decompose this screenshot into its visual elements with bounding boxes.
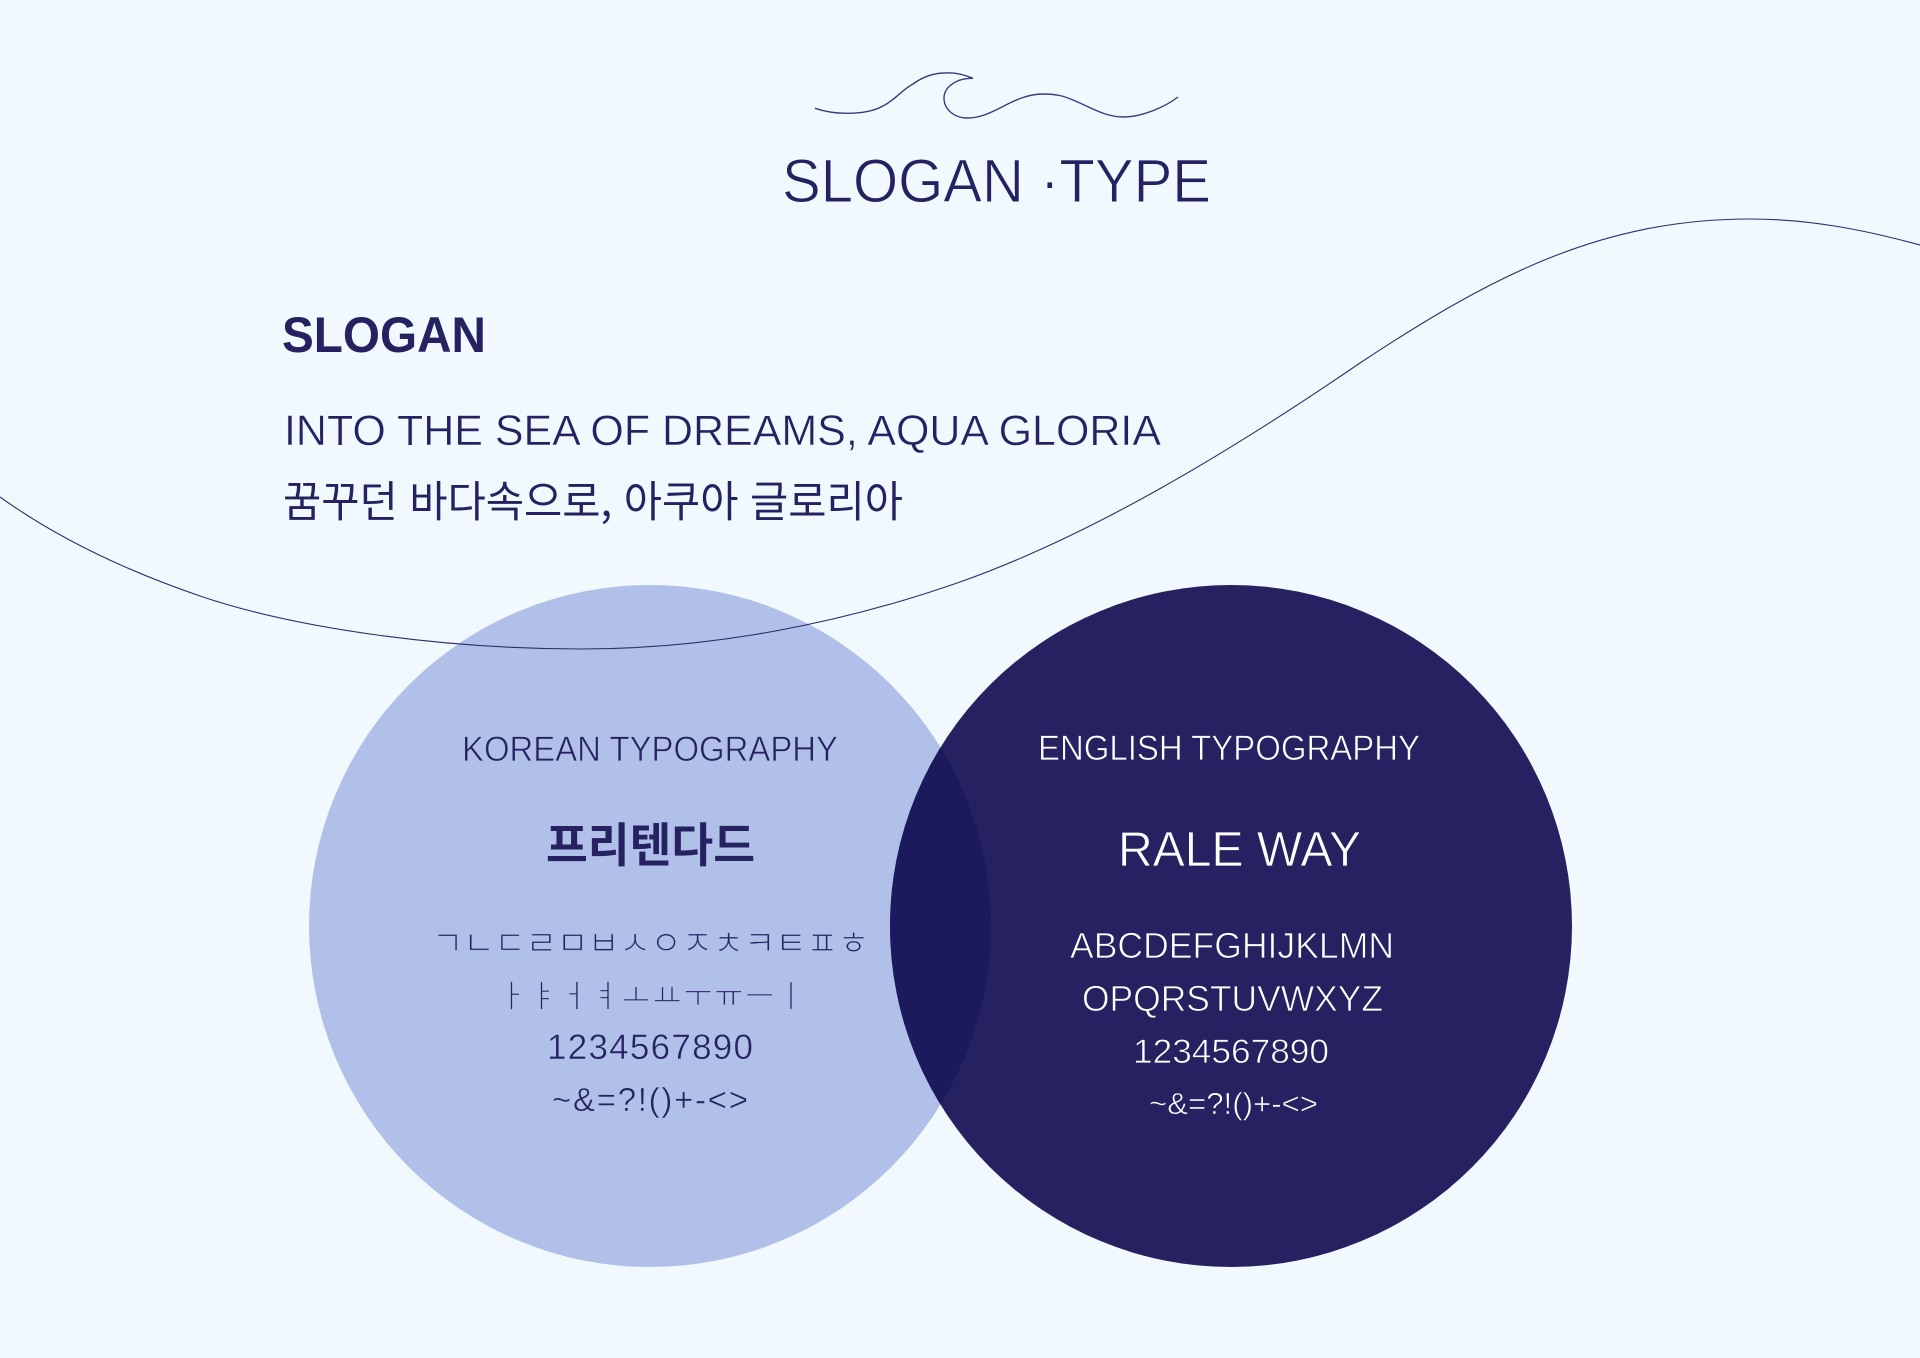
label: Korean typography: KOREAN TYPOGRAPHY — [462, 730, 838, 769]
left circle content: Korean typography — [432, 730, 869, 1118]
font name: Pretendard: 프리텐다드 — [546, 807, 755, 876]
Korean vowels: ㅏㅑㅓㅕㅗㅛㅜㅠㅡㅣ — [498, 971, 805, 1016]
right circle content: English typography — [1038, 729, 1420, 1121]
numerals: 1234567890 — [547, 1028, 753, 1067]
heading: slogan: SLOGAN — [282, 307, 486, 363]
alphabet O to Z: OPQRSTUVWXYZ — [1082, 978, 1383, 1019]
label: English typography: ENGLISH TYPOGRAPHY — [1038, 729, 1420, 768]
circle overlap lens — [890, 748, 991, 1104]
numerals: 1234567890 — [1133, 1033, 1329, 1071]
right circle: English typography background — [890, 585, 1572, 1267]
slogan text: English: INTO THE SEA OF DREAMS, AQUA GLORIA — [284, 407, 1161, 455]
title: SLOGAN ·TYPE — [782, 147, 1211, 215]
font name: Raleway: RALE WAY — [1118, 823, 1361, 877]
symbols: ~&=?!()+-<> — [552, 1081, 748, 1118]
large decorative wave line — [0, 219, 1920, 649]
Korean consonants: ㄱㄴㄷㄹㅁㅂㅅㅇㅈㅊㅋㅌㅍㅎ — [432, 916, 869, 965]
alphabet A to N: ABCDEFGHIJKLMN — [1070, 925, 1394, 966]
icon: small wave logo — [815, 73, 1178, 118]
symbols: ~&=?!()+-<> — [1149, 1086, 1318, 1121]
left circle: Korean typography background — [309, 585, 991, 1267]
slogan text: Korean: 꿈꾸던 바다속으로, 아쿠아 글로리아 — [283, 468, 903, 530]
